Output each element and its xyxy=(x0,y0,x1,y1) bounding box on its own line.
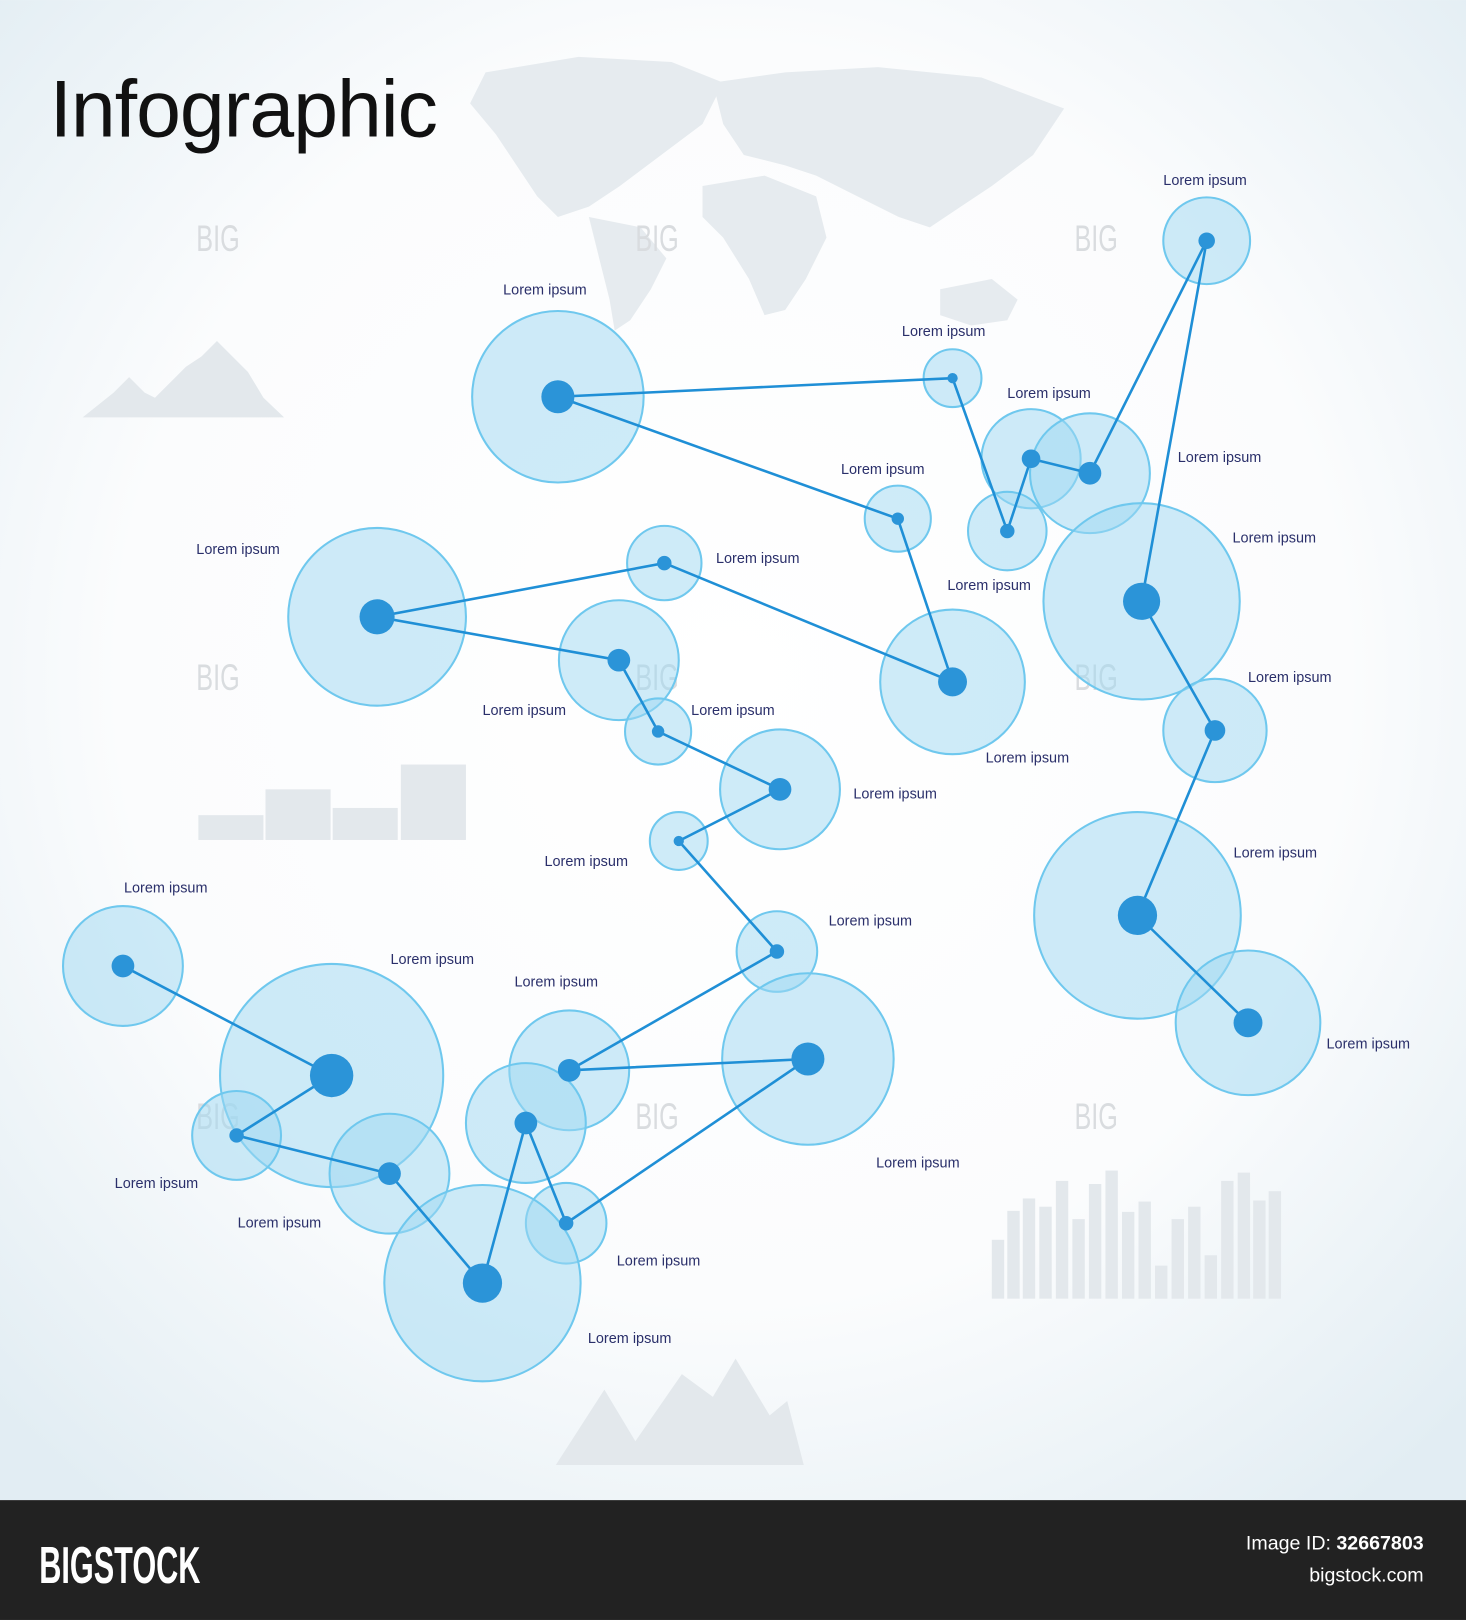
labels: Lorem ipsum xyxy=(391,952,474,968)
icon: mountain chart xyxy=(556,1359,804,1465)
footer bar: BIGSTOCK xyxy=(39,1536,200,1594)
network dots xyxy=(112,232,1262,1303)
labels: Lorem ipsum xyxy=(902,324,985,340)
icon: small area chart xyxy=(83,341,284,417)
watermark: BIG marks: BIG xyxy=(635,217,679,259)
icon: step bar chart xyxy=(198,765,466,840)
labels: Lorem ipsum xyxy=(115,1176,198,1192)
labels: Lorem ipsum xyxy=(238,1215,321,1231)
labels: Lorem ipsum xyxy=(588,1331,671,1347)
labels: Lorem ipsum xyxy=(947,578,1031,594)
watermark: BIG marks: BIG xyxy=(196,656,240,698)
labels: Lorem ipsum xyxy=(514,975,598,991)
labels: Lorem ipsum xyxy=(1007,386,1091,402)
watermark: BIG marks: BIG xyxy=(635,1095,679,1137)
world map xyxy=(470,57,1064,331)
watermark: BIG marks: BIG xyxy=(635,656,679,698)
labels: Lorem ipsum xyxy=(853,787,937,803)
footer bar xyxy=(0,1500,1466,1620)
title: Infographic xyxy=(50,64,437,154)
labels: Lorem ipsum xyxy=(829,914,912,930)
labels: Lorem ipsum xyxy=(716,551,800,567)
labels: Lorem ipsum xyxy=(617,1254,700,1270)
labels: Lorem ipsum xyxy=(196,542,280,558)
labels: Lorem ipsum xyxy=(124,881,208,897)
labels: Lorem ipsum xyxy=(1327,1037,1410,1053)
labels: Lorem ipsum xyxy=(503,282,587,298)
footer bar: bigstock.com xyxy=(1309,1565,1424,1587)
labels: Lorem ipsum xyxy=(1248,670,1332,686)
labels: Lorem ipsum xyxy=(876,1155,960,1171)
labels: Lorem ipsum xyxy=(1178,450,1261,466)
icon: bar chart bottom right xyxy=(992,1171,1281,1299)
labels: Lorem ipsum xyxy=(1163,173,1247,189)
labels: Lorem ipsum xyxy=(1233,530,1316,546)
watermark: BIG marks xyxy=(196,217,1118,1137)
labels: Lorem ipsum xyxy=(1234,846,1317,862)
network links xyxy=(123,241,1248,1283)
network circles xyxy=(63,197,1320,1381)
labels: Lorem ipsum xyxy=(544,854,628,870)
watermark: BIG marks: BIG xyxy=(196,1095,240,1137)
watermark: BIG marks: BIG xyxy=(1074,217,1118,259)
watermark: BIG marks: BIG xyxy=(1074,656,1118,698)
labels: Lorem ipsum xyxy=(841,462,925,478)
labels xyxy=(115,173,1410,1347)
labels: Lorem ipsum xyxy=(482,703,566,719)
labels: Lorem ipsum xyxy=(691,703,775,719)
labels: Lorem ipsum xyxy=(986,750,1069,766)
watermark: BIG marks: BIG xyxy=(1074,1095,1118,1137)
footer bar: Image ID: 32667803 xyxy=(1246,1533,1424,1555)
watermark: BIG marks: BIG xyxy=(196,217,240,259)
